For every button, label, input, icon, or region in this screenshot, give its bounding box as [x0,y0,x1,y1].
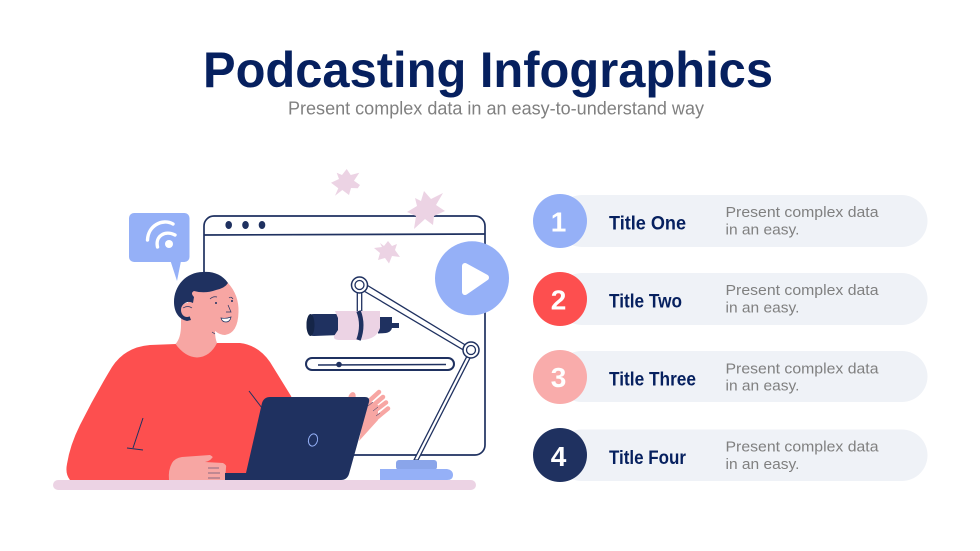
row 4 number badge: 4 [551,441,567,472]
row 1 [533,194,928,248]
row 4 number badge [533,428,587,482]
row 3 description: in an easy. [726,379,800,395]
right hand [347,391,388,441]
row 1 number badge [533,194,587,248]
level slider [306,358,454,370]
microphone boom arm [352,277,479,460]
microphone base [380,460,453,480]
desk [53,480,476,490]
row 3 number badge [533,350,587,404]
microphone [306,311,399,340]
row 2 description: in an easy. [726,300,800,316]
row 2 heading: Title Two [609,292,682,312]
hair [174,272,228,321]
row 1 description: Present complex data [726,205,880,221]
facial features [183,297,233,334]
row 1 heading: Title One [609,214,686,234]
row 3 pill [556,351,928,402]
row 4 [533,428,928,482]
row 3 [533,350,928,404]
row 2 description: Present complex data [726,283,880,299]
row 2 pill [556,273,928,325]
row 1 description: in an easy. [726,222,800,238]
row 2 [533,272,928,326]
person [66,272,388,480]
row 3 description: Present complex data [726,361,880,377]
laptop [225,397,369,480]
sleeve creases [127,391,262,450]
decorative star 1 [331,169,360,196]
ear [181,303,193,317]
row 1 number badge: 1 [551,206,566,238]
decorative star 2 [407,191,445,229]
row 1 pill [556,195,928,247]
row 2 number badge: 2 [551,284,566,316]
row 4 heading: Title Four [609,448,687,469]
row 4 description: in an easy. [726,457,800,473]
subtitle: Present complex data in an easy-to-understand way [288,98,704,118]
row 2 number badge [533,272,587,326]
speech bubble wifi icon [129,213,190,281]
shirt [66,343,300,480]
title: Podcasting Infographics [203,42,773,98]
illustration: podcaster at desk [53,169,509,490]
left hand [169,455,226,480]
face and neck [176,283,239,358]
row 3 number badge: 3 [551,362,566,393]
row 4 description: Present complex data [726,440,880,456]
row 3 heading: Title Three [609,370,696,391]
row 4 pill [556,430,928,481]
decorative star 3 [374,241,400,264]
play button [435,241,509,315]
browser window [204,216,485,455]
